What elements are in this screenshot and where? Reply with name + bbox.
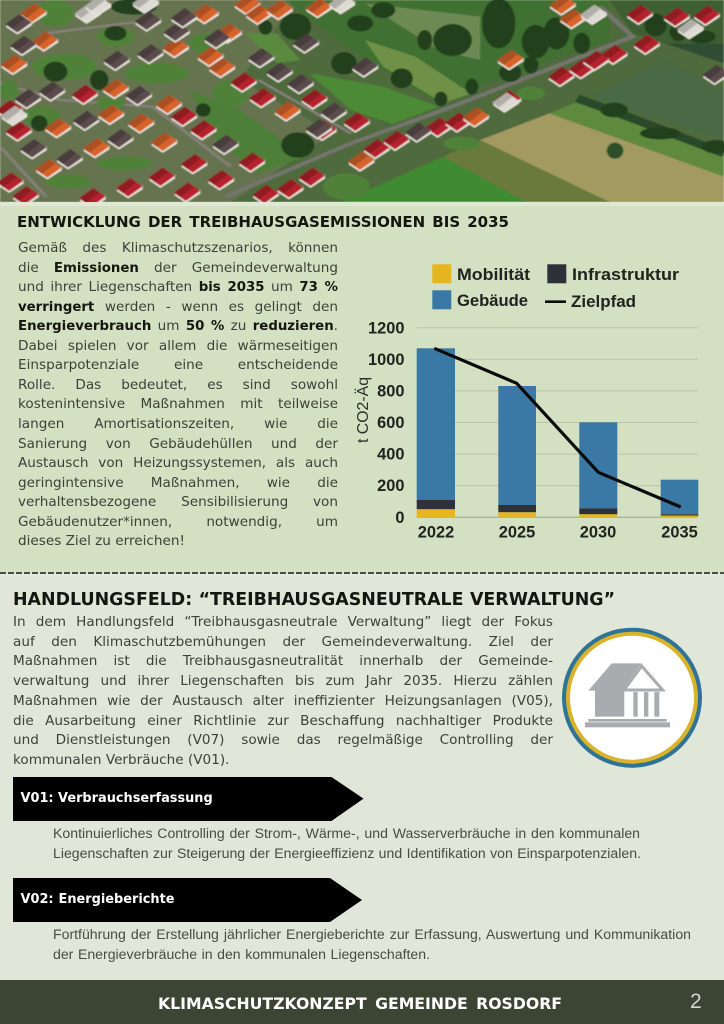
y axis labels: 1200 — [368, 320, 404, 338]
dashed divider — [0, 572, 724, 574]
description: V02: Fortführung der Erstellung jährlicher Energieberichte zur Erfassung, Auswertung und Kommunikation — [53, 926, 691, 942]
text block: emissions scenario: Austausch von Heizungssystemen, als auch — [18, 455, 338, 471]
x axis labels: 2025 — [499, 524, 535, 542]
y axis labels: 400 — [377, 446, 404, 464]
text block: field of action: die Ausarbeitung einer Richtlinie zur Beschaffung nachhaltiger Produkte — [13, 712, 553, 728]
panel top edge highlight — [0, 202, 724, 206]
legend: Zielpfad — [571, 292, 636, 311]
description: V01: Kontinuierliches Controlling der Strom-, Wärme-, und Wasserverbräuche in den kommunalen — [53, 825, 640, 841]
chart: emissions by sector 2022 to 2035 — [354, 264, 698, 542]
text block: emissions scenario: verringert werden - wenn es gelingt den — [18, 299, 338, 315]
text block: emissions scenario: Energieverbrauch um 50 % zu reduzieren. — [18, 318, 338, 334]
stacked bars — [417, 348, 698, 517]
x axis labels — [418, 524, 698, 542]
icon: public building in ring — [562, 628, 702, 768]
text block: emissions scenario: geringintensive Maßnahmen, wie die — [18, 475, 338, 491]
legend — [432, 264, 679, 311]
x axis labels: 2035 — [661, 524, 698, 542]
y axis labels: 800 — [377, 382, 404, 400]
text block: emissions scenario: verhaltensbezogene Sensibilisierung von — [18, 494, 338, 510]
y axis title: t CO2-Äq — [354, 377, 372, 443]
y axis labels — [368, 320, 404, 527]
text block: emissions scenario: Dabei spielen vor allem die wärmeseitigen — [18, 338, 338, 354]
arrow label: V01 — [13, 777, 364, 821]
description: V02 — [53, 926, 691, 962]
text block: emissions scenario: und ihrer Liegenschaften bis 2035 um 73 % — [18, 279, 338, 295]
text block: field of action: verwaltung und ihrer Liegenschaften bis zum Jahr 2035. Hierzu zählen — [13, 673, 553, 689]
text block: emissions scenario: dieses Ziel zu erreichen! — [18, 533, 185, 549]
text block: emissions scenario — [18, 240, 338, 549]
footer title: KLIMASCHUTZKONZEPT GEMEINDE ROSDORF — [158, 994, 562, 1013]
y axis labels: 0 — [395, 509, 404, 527]
y axis labels: 600 — [377, 414, 404, 432]
description: V01: Liegenschaften zur Steigerung der Energieeffizienz und Identifikation von Einsparpotenzialen. — [53, 845, 641, 861]
text block: field of action — [13, 614, 553, 768]
text block: field of action: auf den Klimaschutzbemühungen der Gemeindeverwaltung. Ziel der — [13, 634, 553, 650]
text block: emissions scenario: kostenintensive Maßnahmen mit teilweise — [18, 396, 338, 412]
text block: field of action: Maßnahmen ist die Treibhausgasneutralität innerhalb der Gemeinde- — [13, 653, 553, 669]
text block: emissions scenario: langen Amortisationszeiten, wie die — [18, 416, 338, 432]
text block: emissions scenario: Einsparpotenziale eine entscheidende — [18, 357, 338, 373]
legend: Gebäude — [457, 291, 528, 310]
text block: field of action: kommunalen Verbräuche (V01). — [13, 752, 229, 768]
text block: field of action: In dem Handlungsfeld “Treibhausgasneutrale Verwaltung” liegt der Fokus — [13, 614, 553, 630]
aerial photo of the settlement — [0, 0, 724, 202]
panel: emissions development — [0, 202, 724, 572]
arrow label: V01: V01: Verbrauchserfassung — [20, 791, 213, 806]
text block: field of action: und Dienstleistungen (V07) sowie das regelmäßige Controlling der — [13, 732, 553, 748]
text block: emissions scenario: Gemäß des Klimaschutzszenarios, können — [18, 240, 338, 256]
page number: 2 — [690, 990, 702, 1013]
y axis labels: 200 — [377, 477, 404, 495]
x axis labels: 2030 — [580, 524, 616, 542]
y axis labels: 1000 — [368, 351, 404, 369]
description: V01 — [53, 825, 641, 861]
x axis labels: 2022 — [418, 524, 454, 542]
legend: Mobilität — [457, 265, 530, 284]
text block: field of action: Maßnahmen wie der Austausch alter ineffizienter Heizungsanlagen (V05), — [13, 693, 553, 709]
description: V02: der Energieverbräuche in den kommunalen Liegenschaften. — [53, 946, 430, 962]
legend: Infrastruktur — [572, 265, 679, 284]
target path line — [434, 348, 681, 507]
heading: field of action: HANDLUNGSFELD: “TREIBHAUSGASNEUTRALE VERWALTUNG” — [13, 590, 615, 610]
text block: emissions scenario: die Emissionen der Gemeindeverwaltung — [18, 260, 338, 276]
footer bar — [0, 980, 724, 1024]
arrow label: V02 — [13, 878, 362, 922]
text block: emissions scenario: Rolle. Das bedeutet, es sind sowohl — [18, 377, 338, 393]
text block: emissions scenario: Gebäudenutzer*innen, notwendig, um — [18, 514, 338, 530]
heading: emissions: ENTWICKLUNG DER TREIBHAUSGASEMISSIONEN BIS 2035 — [17, 213, 509, 231]
arrow label: V02: V02: Energieberichte — [20, 892, 174, 907]
text block: emissions scenario: Sanierung von Gebäudehüllen und der — [18, 436, 338, 452]
